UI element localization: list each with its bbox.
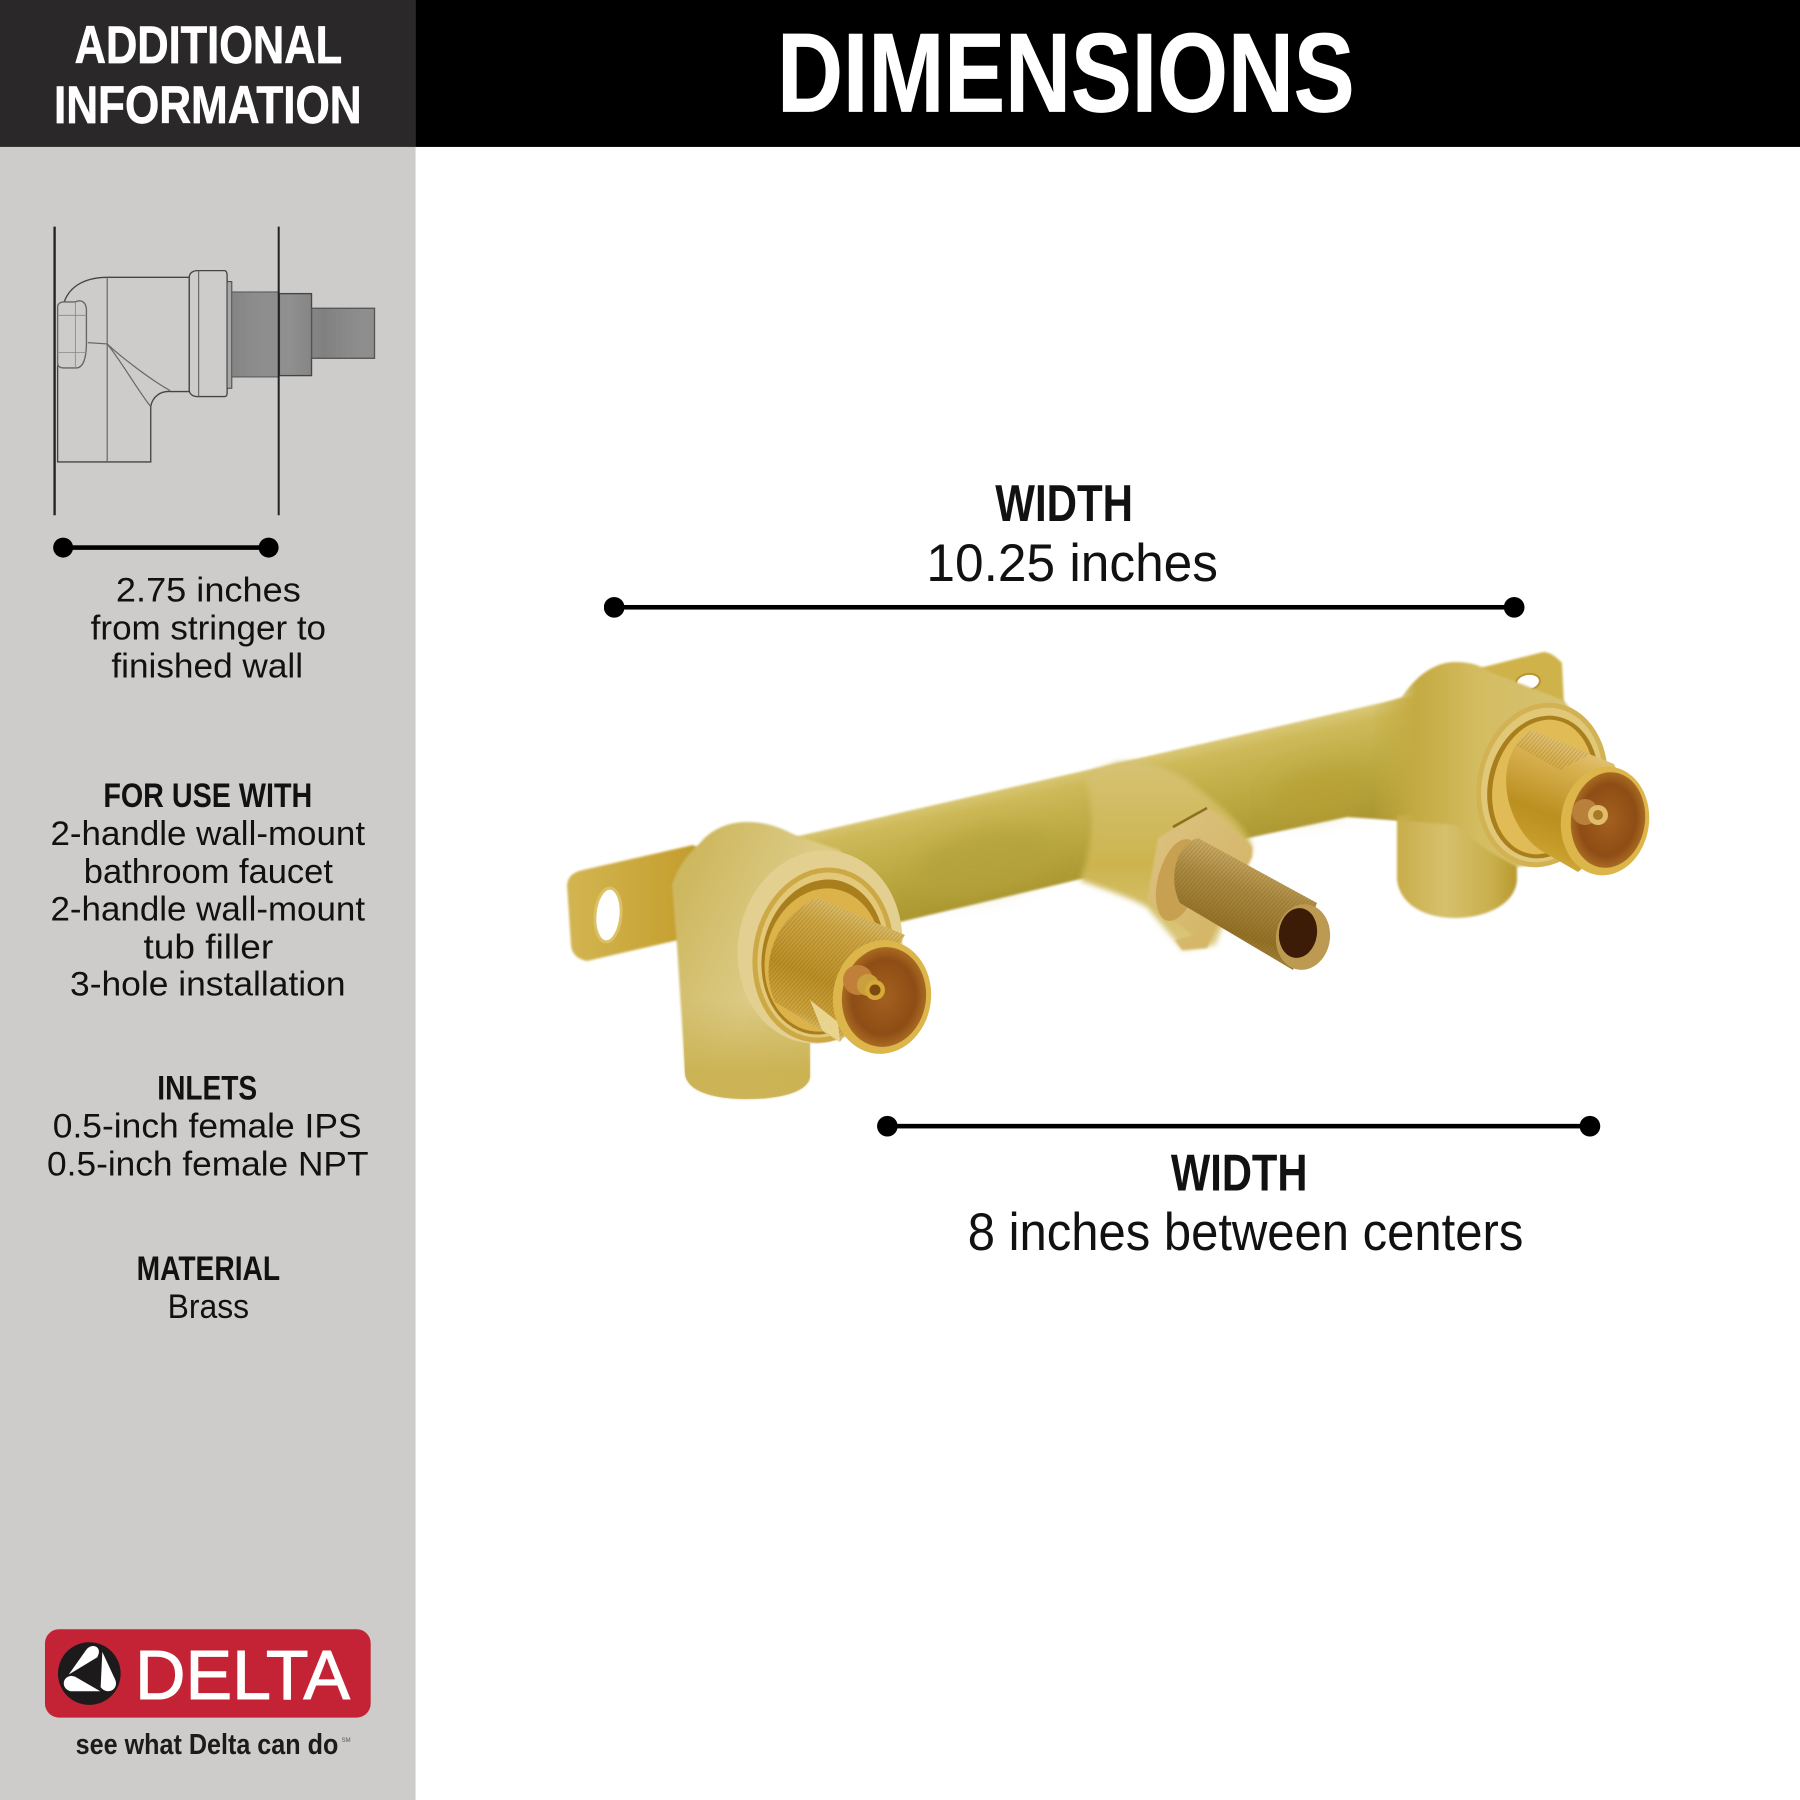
label: overall width: 10.25 inches [926,534,1218,593]
left body and drop [672,822,860,1099]
text: stringer depth: from stringer to [91,609,326,647]
text: for use with: FOR USE WITH [103,777,312,815]
right bore [1554,761,1656,881]
faucet valve photo illustration [567,652,1656,1099]
right flange hole [1515,672,1541,692]
text: inlets [47,1070,368,1184]
text: for use with: 2-handle wall-mount [51,891,365,929]
text: inlets: 0.5-inch female IPS [53,1108,362,1146]
left flange hole [593,887,623,943]
text: material: MATERIAL [137,1250,280,1288]
label: between centers: WIDTH [1171,1143,1308,1201]
text: stringer depth [91,572,326,685]
left threaded stem [769,898,905,1042]
logo: Delta: see what Delta can do [76,1729,338,1761]
label: overall width [926,474,1218,593]
text: for use with: 3-hole installation [70,965,346,1003]
right threaded stem [1506,730,1640,872]
header: dimensions title [416,0,1800,147]
text: material: Brass [168,1288,249,1326]
diagram: side profile line drawing [55,227,375,515]
pipe shading patches [910,757,1374,905]
text: stringer depth: 2.75 inches [116,572,301,610]
right collar [1461,690,1623,880]
label: between centers [968,1143,1523,1262]
main pipe [790,694,1420,930]
text: inlets: INLETS [157,1070,257,1108]
text: for use with: tub filler [143,929,273,967]
text: for use with: bathroom faucet [84,853,333,891]
dimension line: overall width [604,597,1524,618]
logo: Delta [45,1629,371,1761]
text: inlets: 0.5-inch female NPT [47,1146,368,1184]
left mounting flange [567,845,720,961]
right body [1375,662,1603,867]
header: additional information: INFORMATION [54,76,362,135]
text: stringer depth: finished wall [111,647,303,685]
logo: Delta: DELTA [135,1636,350,1714]
right drop [1397,815,1517,918]
left bore [826,934,938,1060]
panel: additional information sidebar [0,147,416,1800]
text: for use with: 2-handle wall-mount [51,815,365,853]
center tee body [1080,762,1252,950]
center nut [1147,808,1252,950]
header: additional information [0,0,416,147]
label: between centers: 8 inches between centers [968,1203,1523,1262]
dimension line: 2.75 inches [53,538,279,558]
left collar [722,837,918,1057]
logo: Delta: SM [342,1738,351,1744]
header: dimensions title: DIMENSIONS [777,9,1355,135]
dimension line: between centers [877,1116,1600,1136]
left drop shading [682,1000,810,1099]
header: additional information: ADDITIONAL [75,16,342,75]
text: material [137,1250,280,1326]
text: for use with [51,777,365,1003]
right mounting flange [1480,652,1564,705]
center threaded stem [1174,838,1334,973]
label: overall width: WIDTH [995,474,1133,532]
nut brass face [1148,834,1208,926]
nut shadow gap [1173,808,1207,827]
